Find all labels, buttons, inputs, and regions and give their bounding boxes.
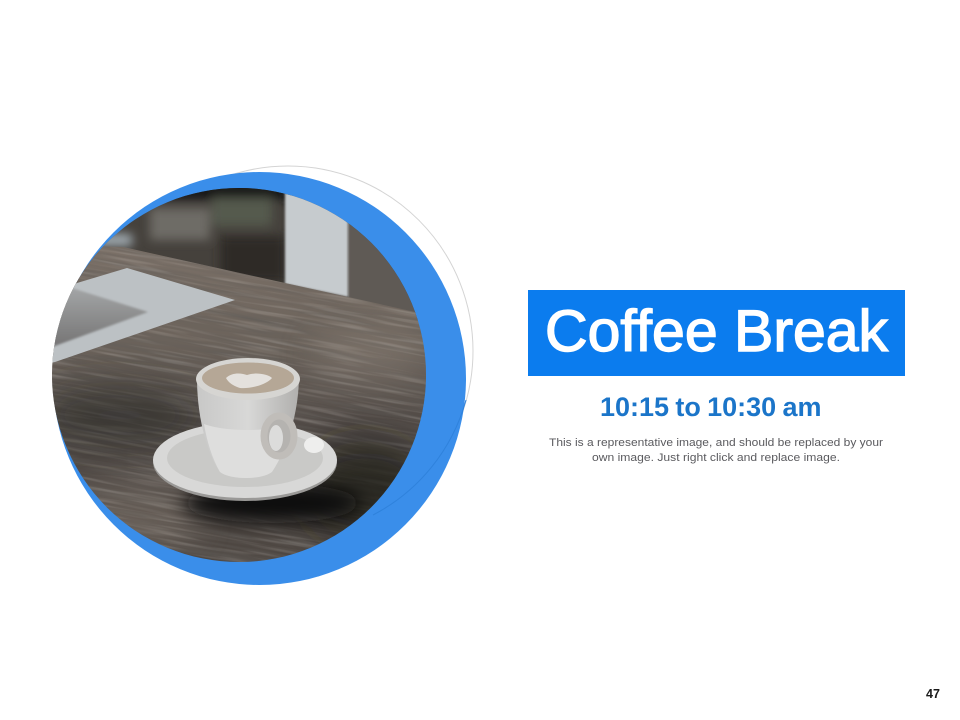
- thin arc over blue: [373, 400, 466, 515]
- photo: cup handle: [264, 416, 294, 456]
- description text: This is a representative image, and should be replaced by your: [549, 437, 883, 449]
- photo: cup body: [197, 383, 299, 433]
- photo: saucer shadow: [184, 483, 360, 523]
- thin outline circle: [103, 166, 473, 536]
- circular coffee photo: [52, 188, 426, 562]
- photo: cup rim and coffee: [196, 358, 300, 400]
- page number: 47: [926, 687, 940, 701]
- photo: blurred background: [50, 182, 430, 320]
- description text: [549, 437, 883, 464]
- photo: white pillar: [285, 190, 348, 297]
- photo: saucer: [153, 422, 337, 501]
- title text: Coffee Break: [545, 299, 889, 364]
- blue circle behind photo: [53, 172, 466, 585]
- photo: laptop: [40, 268, 235, 365]
- description text: own image. Just right click and replace image.: [592, 452, 840, 464]
- time subtitle: 10:15 to 10:30 am: [600, 392, 822, 422]
- photo: cup lower band: [204, 424, 279, 478]
- title banner: [528, 290, 905, 376]
- photo: table top: [52, 246, 426, 562]
